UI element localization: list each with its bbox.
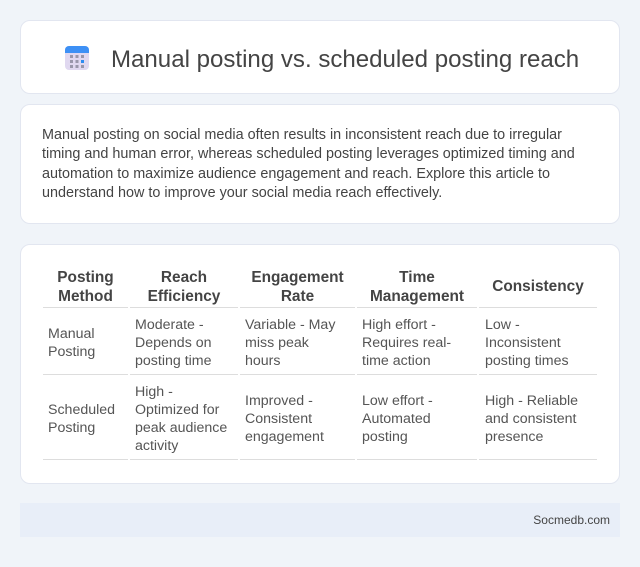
table row: manual posting: Inconsistent	[485, 335, 561, 351]
table row: manual posting: Variable - May	[245, 317, 335, 333]
table row: manual posting: Requires real-	[362, 335, 451, 351]
table headers: Management	[370, 288, 464, 305]
table row: scheduled posting: Scheduled	[48, 402, 115, 418]
title: Manual posting vs. scheduled posting reach	[111, 46, 579, 73]
table headers	[57, 269, 584, 305]
table headers: Time	[399, 269, 435, 286]
table headers: Rate	[281, 288, 314, 305]
panel: header	[20, 20, 620, 94]
table row: scheduled posting: Automated	[362, 411, 431, 427]
intro text: automation to maximize audience engagement and reach. Explore this article to	[42, 166, 550, 182]
table row: scheduled posting: High -	[135, 384, 173, 400]
table row: scheduled posting: peak audience	[135, 420, 227, 436]
intro text: Manual posting on social media often results in inconsistent reach due to irregular	[42, 127, 562, 143]
footer text: Socmedb.com	[533, 513, 610, 527]
table row: manual posting: Posting	[48, 344, 95, 360]
table row: scheduled posting: Improved -	[245, 393, 313, 409]
panel: introduction	[20, 104, 620, 224]
footer bar	[20, 503, 620, 537]
intro text: understand how to improve your social media reach effectively.	[42, 185, 442, 201]
table row: scheduled posting: posting	[362, 429, 408, 445]
table row: scheduled posting: Posting	[48, 420, 95, 436]
table row: manual posting: Low -	[485, 317, 520, 333]
table headers: Posting	[57, 269, 114, 286]
table headers: Method	[58, 288, 113, 305]
icon: calendar	[65, 46, 89, 70]
table row: manual posting	[48, 317, 569, 369]
table row: manual posting: Depends on	[135, 335, 212, 351]
table headers: Engagement	[251, 269, 344, 286]
table row: manual posting: posting time	[135, 353, 212, 369]
table row: scheduled posting: Consistent	[245, 411, 312, 427]
table row: scheduled posting	[48, 384, 578, 454]
table row: manual posting: Moderate -	[135, 317, 204, 333]
table row: scheduled posting: presence	[485, 429, 543, 445]
table row: scheduled posting: engagement	[245, 429, 324, 445]
table row: manual posting: hours	[245, 353, 280, 369]
table row: scheduled posting: and consistent	[485, 411, 576, 427]
table row: manual posting: posting times	[485, 353, 569, 369]
table row: manual posting: miss peak	[245, 335, 309, 351]
table row: scheduled posting: activity	[135, 438, 178, 454]
table row: manual posting: High effort -	[362, 317, 436, 333]
intro text	[42, 127, 575, 201]
panel: comparison table	[20, 244, 620, 484]
table row: manual posting: time action	[362, 353, 431, 369]
table row: scheduled posting: Low effort -	[362, 393, 433, 409]
table headers: Efficiency	[148, 288, 220, 305]
table headers: Reach	[161, 269, 207, 286]
intro text: timing and human error, whereas scheduled posting leverages optimized timing and	[42, 146, 575, 162]
table row: scheduled posting: High - Reliable	[485, 393, 578, 409]
table row: scheduled posting: Optimized for	[135, 402, 219, 418]
table headers: Consistency	[492, 278, 584, 295]
table row: manual posting: Manual	[48, 326, 95, 342]
